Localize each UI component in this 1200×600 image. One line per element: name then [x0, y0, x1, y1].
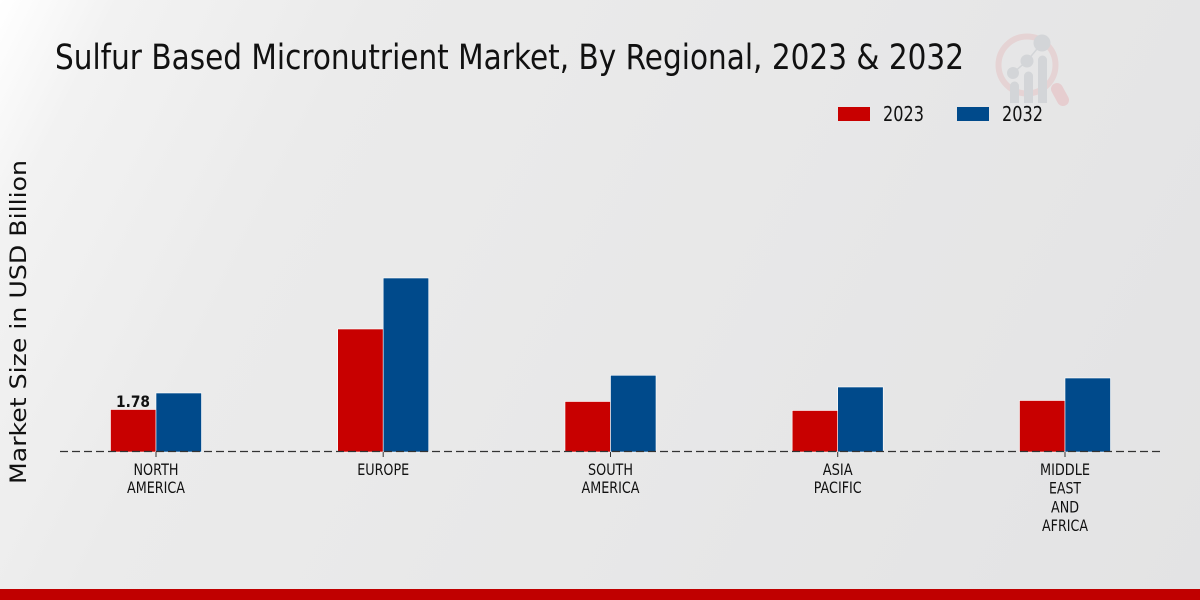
- label: Middle East and Africa: AND: [1051, 498, 1079, 516]
- data label: 1.78: [116, 392, 150, 411]
- bar chart: [60, 278, 1160, 457]
- bars: Middle East and Africa: [1020, 378, 1110, 452]
- label: Asia Pacific: ASIA: [823, 460, 853, 479]
- legend: [838, 102, 1043, 126]
- label: Middle East and Africa: MIDDLE: [1040, 460, 1090, 479]
- bars: Asia Pacific: [792, 387, 883, 452]
- bars: Europe: [338, 278, 429, 452]
- y axis title: Market Size in USD Billion: [6, 160, 32, 484]
- footer bar: [0, 589, 1200, 600]
- label: North America: AMERICA: [127, 478, 185, 497]
- watermark logo: [998, 34, 1063, 103]
- label: North America: NORTH: [134, 460, 178, 479]
- baseline: [60, 450, 1160, 452]
- label: Middle East and Africa: EAST: [1049, 478, 1081, 498]
- label: South America: SOUTH: [588, 460, 633, 479]
- label: Europe: EUROPE: [357, 460, 409, 479]
- legend: 2032: [1002, 102, 1043, 126]
- label: Middle East and Africa: AFRICA: [1042, 516, 1088, 535]
- bars: South America: [565, 375, 656, 452]
- x axis labels: [127, 460, 1090, 535]
- title: Sulfur Based Micronutrient Market, By Regional, 2023 & 2032: [55, 38, 964, 78]
- bars: North America: [110, 393, 202, 452]
- label: South America: AMERICA: [582, 478, 640, 497]
- legend: 2023: [883, 102, 924, 126]
- label: Asia Pacific: PACIFIC: [814, 478, 862, 497]
